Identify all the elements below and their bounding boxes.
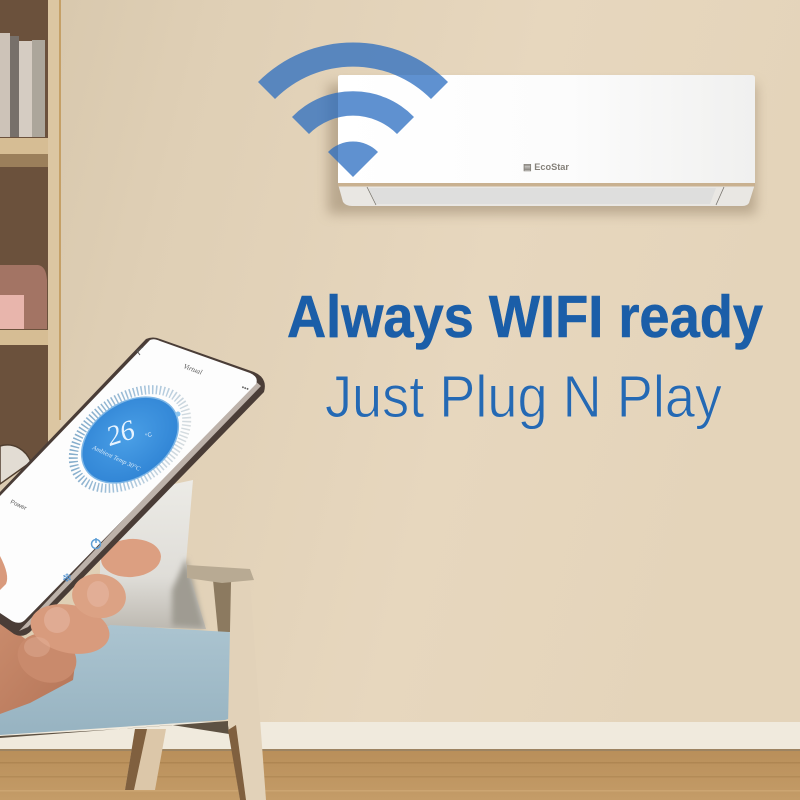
cushion: [0, 625, 237, 735]
power label: Power: [9, 499, 27, 512]
icon: fan snowflake: ❄: [62, 571, 72, 585]
index finger: [100, 537, 162, 579]
front panel: [338, 75, 755, 183]
gold trim: [338, 183, 755, 186]
wooden floor: [0, 751, 800, 800]
dial knob: [176, 412, 180, 416]
shadow: [328, 84, 756, 214]
menu dots: •••: [240, 384, 250, 394]
icon: power: [92, 538, 100, 548]
icon: wifi signal: [258, 43, 448, 177]
bookshelf: [0, 0, 61, 484]
left fingertip: [0, 556, 7, 590]
back arrow: [137, 347, 143, 355]
back pillow: [100, 480, 206, 629]
wifi outer arc: [258, 43, 448, 99]
air conditioner: [328, 75, 756, 214]
pink decorative box: [0, 265, 47, 329]
ring finger: [26, 597, 114, 661]
temperature value: 26: [103, 415, 139, 453]
subheading: Just Plug N Play: [325, 364, 722, 430]
side panel: [48, 0, 60, 440]
temperature dial ticks: [55, 369, 205, 509]
smartphone: [0, 338, 265, 636]
screen title: Virtual: [182, 362, 203, 377]
rear upright: [213, 580, 232, 632]
books: [0, 33, 45, 137]
wifi middle arc: [292, 91, 414, 134]
cushion underside strut: [0, 721, 229, 738]
chair: [0, 480, 266, 800]
phone frame: [0, 338, 265, 636]
lower flap: [338, 184, 755, 206]
shelf back panel: [0, 0, 48, 470]
clock on lower shelf: [0, 445, 31, 484]
skirting board: [0, 722, 800, 751]
temperature dial: [65, 379, 195, 501]
back leg: [125, 729, 166, 790]
wifi centre wedge: [328, 141, 378, 177]
phone screen: [0, 339, 257, 623]
headline: Always WIFI ready: [287, 284, 763, 350]
front leg: [228, 583, 266, 800]
middle finger: [69, 570, 129, 622]
hand: palm behind phone: [0, 620, 75, 714]
phone metal edge: [19, 380, 261, 631]
little finger: [11, 625, 83, 691]
brand logo: ▤ EcoStar: [523, 162, 569, 172]
rear arm: [187, 565, 254, 583]
flap hinges: [367, 187, 724, 205]
ambient temperature label: Ambient Temp 30°C: [90, 444, 142, 473]
pillow shading: [172, 558, 204, 628]
shelf boards: [0, 138, 48, 154]
hand: fingers: [0, 556, 129, 691]
nails: [24, 581, 109, 657]
degree unit: °C: [145, 432, 154, 440]
